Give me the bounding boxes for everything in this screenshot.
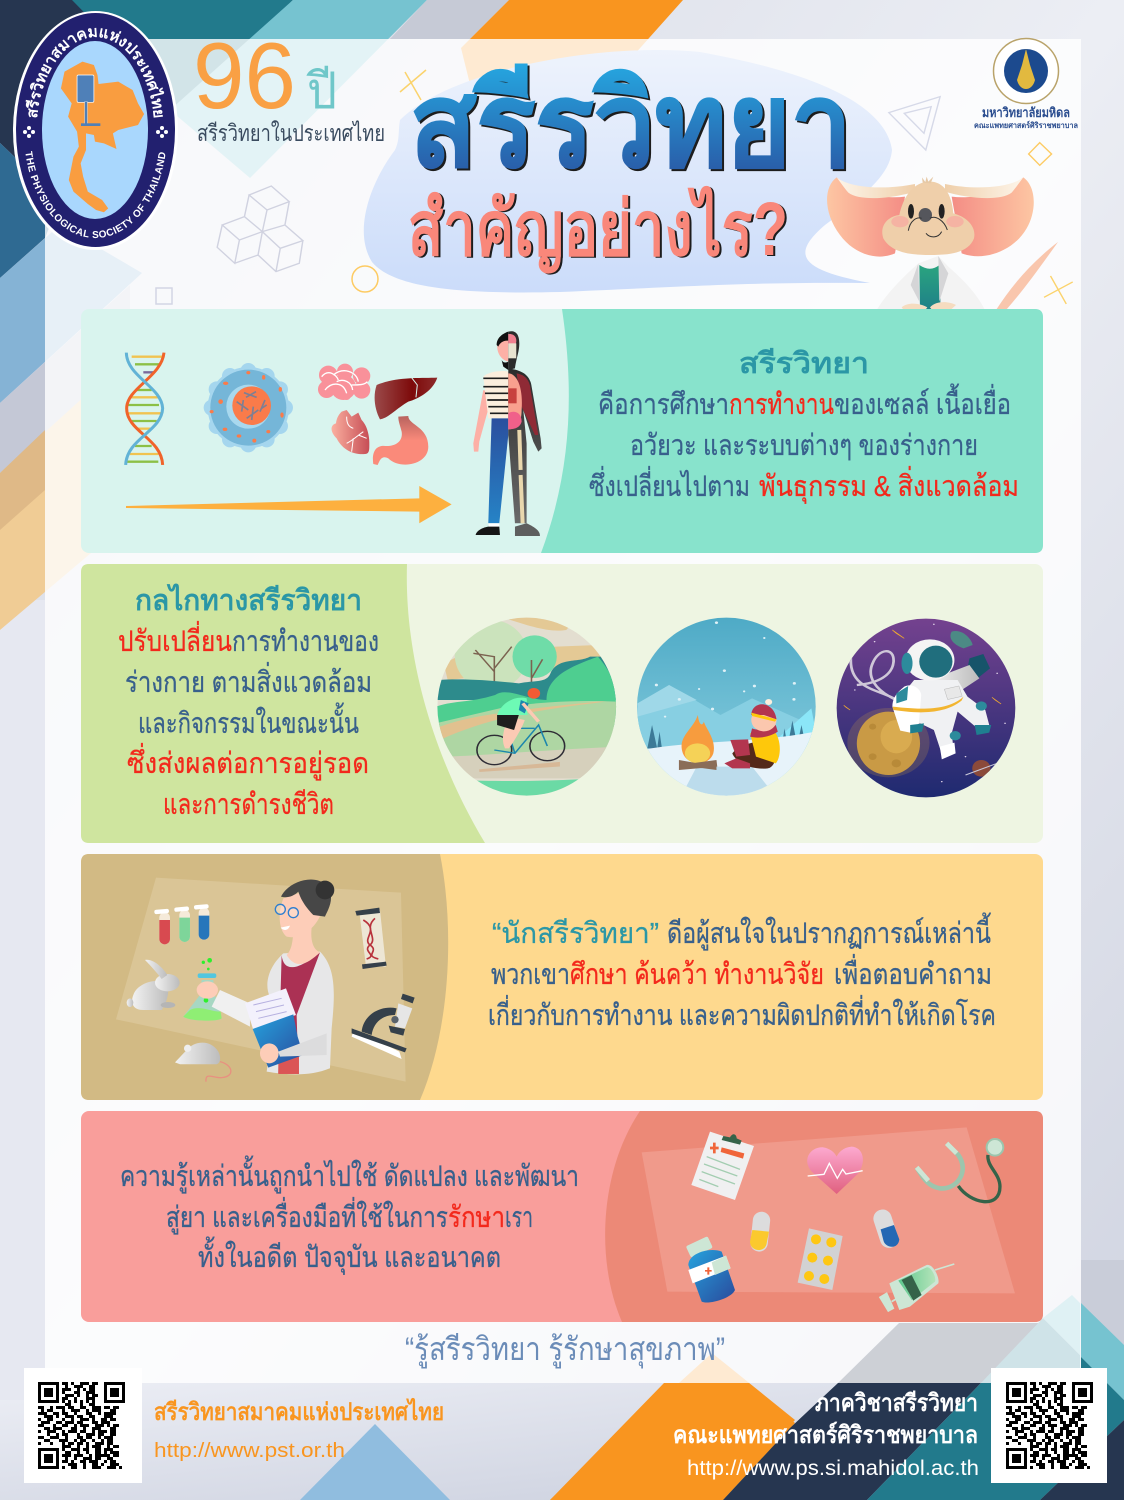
icon: pills (750, 1207, 901, 1252)
icon: DNA (126, 353, 164, 465)
icon: microscope (352, 994, 415, 1059)
icon: brain (318, 364, 370, 400)
definition text: อวัยวะ และระบบต่างๆ ของร่างกาย (630, 430, 978, 462)
QR code: department (991, 1368, 1107, 1483)
years label: ปี (306, 63, 337, 119)
icon: heart with pulse (807, 1147, 863, 1194)
mechanism text: การทำงานของ (232, 626, 379, 658)
icon: blister pack (798, 1228, 843, 1290)
closing quote: “รู้สรีรวิทยา รู้รักษาสุขภาพ” (405, 1331, 725, 1369)
secondary title: สำคัญอย่างไร? (410, 186, 790, 275)
mechanism text: ร่างกาย ตามสิ่งแวดล้อม (125, 662, 372, 699)
icon: human body half skeleton (473, 331, 542, 536)
society url: http://www.pst.or.th (154, 1440, 345, 1462)
physiologist text: “นักสรีรวิทยา” (492, 918, 659, 950)
physiologist text: เกี่ยวกับการทำงาน และความผิดปกติที่ทำให้เกิดโรค (488, 995, 996, 1032)
application text: เรา (505, 1202, 533, 1234)
scene: campfire in snow (633, 617, 819, 800)
icon: flask (183, 958, 222, 1021)
definition text: ของเซลล์ เนื้อเยื่อ (834, 383, 1011, 421)
department url: http://www.ps.si.mahidol.ac.th (687, 1457, 979, 1480)
panel: physiologists (81, 854, 1043, 1100)
illustrations: levels of organisation (126, 331, 542, 536)
icon: clipboard (691, 1132, 754, 1200)
logo: Mahidol University (974, 38, 1078, 130)
main title: สรีรวิทยา (412, 62, 854, 194)
footer: society contact: สรีรวิทยาสมาคมแห่งประเทศไทย (154, 1397, 444, 1426)
mechanism text (118, 621, 379, 821)
panel: definition of physiology (81, 309, 1043, 553)
footer: society contact (154, 1397, 444, 1462)
application text: สู่ยา และเครื่องมือที่ใช้ในการ (166, 1197, 448, 1235)
application text (120, 1155, 579, 1275)
heading: สรีรวิทยา (739, 348, 869, 380)
panel: physiological mechanisms (81, 564, 1043, 843)
physiologist text: ดีอผู้สนใจในปรากฏการณ์เหล่านี้ (667, 912, 991, 951)
logo ornaments (23, 126, 168, 138)
definition text: คือการศึกษา (598, 389, 729, 421)
heading: กลไกทางสรีรวิทยา (135, 583, 362, 617)
mascot: mouse in lab coat (827, 177, 1034, 317)
physiologist text: เพื่อตอบคำถาม (834, 954, 992, 991)
definition text: ซึ่งเปลี่ยนไปตาม (589, 466, 750, 503)
map of Thailand (61, 62, 144, 212)
main title: สรีรวิทยา (410, 60, 852, 192)
mechanism text: และกิจกรรมในขณะนั้น (138, 702, 359, 740)
decorative line shapes (156, 70, 1073, 310)
subtitle: สรีรวิทยาในประเทศไทย (197, 120, 385, 146)
icon: syringe (880, 1264, 954, 1311)
application text: ทั้งในอดีต ปัจจุบัน และอนาคต (198, 1236, 501, 1275)
logo: Physiological Society of Thailand (13, 11, 178, 250)
mechanism text: ซึ่งส่งผลต่อการอยู่รอด (127, 743, 369, 781)
faculty name: คณะแพทยศาสตร์ศิริราชพยาบาล (974, 120, 1078, 130)
scene: astronaut in space (835, 617, 1017, 798)
icon: test tubes (154, 904, 209, 944)
footer: department contact (673, 1390, 979, 1480)
secondary title: สำคัญอย่างไร? (408, 185, 788, 274)
illustration: scientist in lab (116, 878, 415, 1082)
icon: cell (204, 363, 293, 452)
definition text: พันธุกรรม & สิ่งแวดล้อม (759, 466, 1019, 504)
icon: heart (332, 410, 369, 454)
logo Thai arc text: สรีรวิทยาสมาคมแห่งประเทศไทย (26, 28, 164, 118)
anniversary: 96 years: 96 (193, 23, 296, 128)
definition text (589, 383, 1019, 504)
footer geometric shapes (550, 1260, 1124, 1500)
mechanism text: และการดำรงชีวิต (163, 789, 334, 821)
arrow (126, 486, 452, 523)
scene: cycling (436, 617, 618, 797)
physiologist text (488, 912, 996, 1032)
figure: scientist (197, 880, 334, 1074)
icon: rabbit (127, 960, 180, 1010)
decorative blob behind title (364, 50, 892, 292)
application text: ความรู้เหล่านั้นถูกนำไปใช้ ดัดแปลง และพัฒนา (120, 1155, 579, 1194)
icon: medicine bottle (686, 1236, 735, 1303)
scenes in three environments (436, 617, 1017, 800)
faculty: คณะแพทยศาสตร์ศิริราชพยาบาล (673, 1421, 978, 1449)
panel: applications in medicine (81, 1111, 1043, 1322)
physiologist text: ศึกษา ค้นคว้า ทำงานวิจัย (570, 959, 824, 991)
application text: รักษา (448, 1202, 505, 1234)
icon: liver (375, 378, 437, 419)
icon: stethoscope (917, 1139, 1003, 1202)
university name: มหาวิทยาลัยมหิดล (982, 105, 1070, 120)
medical illustrations (642, 1127, 1015, 1311)
icon: DNA sample (355, 908, 387, 969)
footer: department contact: ภาควิชาสรีรวิทยา (815, 1390, 978, 1417)
icon: stomach (373, 416, 428, 465)
mechanism text: ปรับเปลี่ยน (118, 621, 232, 658)
anniversary: 96 years (193, 23, 385, 146)
QR code: society (24, 1368, 142, 1483)
logo English arc text: THE PHYSIOLOGICAL SOCIETY OF THAILAND (26, 151, 166, 238)
main title (408, 60, 854, 275)
icon: mouse (175, 1043, 231, 1082)
physiologist text: พวกเขา (491, 959, 570, 991)
definition text: การทำงาน (729, 389, 834, 421)
